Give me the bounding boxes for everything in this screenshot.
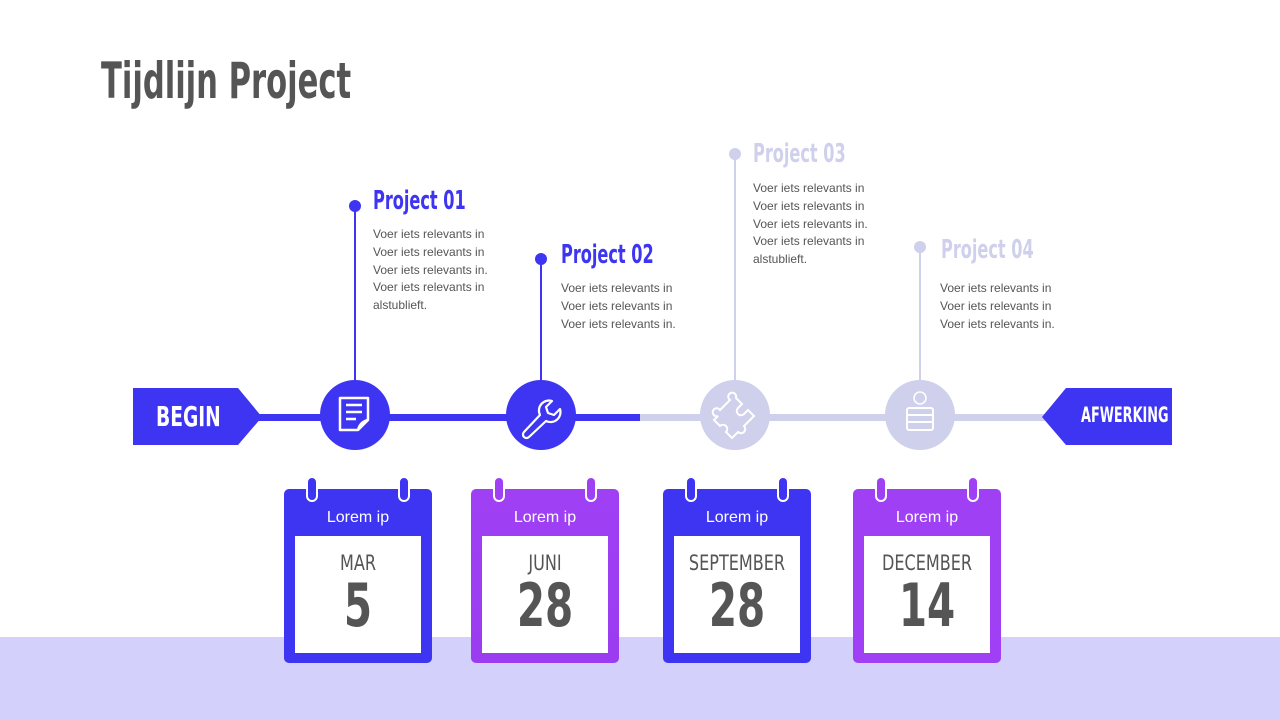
text 01: Voer iets relevants in: [373, 280, 484, 294]
text 01: alstublieft.: [373, 298, 427, 312]
icon: coins: [885, 380, 955, 450]
calendar: MAR 5: 5: [344, 571, 372, 641]
icon: puzzle: [700, 380, 770, 450]
bottom band: [0, 637, 1280, 720]
AFWERKING marker: [1042, 388, 1172, 445]
calendar: DECEMBER 14: DECEMBER: [882, 551, 972, 575]
Project 03: Project 03: [753, 139, 846, 169]
text 02: Voer iets relevants in: [561, 281, 672, 295]
calendar: MAR 5: MAR: [340, 551, 376, 575]
calendar: DECEMBER 14: 14: [899, 571, 955, 641]
calendar: JUNI 28: Lorem ip: [514, 509, 576, 526]
calendar: SEPTEMBER 28: Lorem ip: [706, 509, 768, 526]
calendar: MAR 5: Lorem ip: [327, 509, 389, 526]
text 02: [561, 281, 676, 331]
text 02: Voer iets relevants in: [561, 299, 672, 313]
stems: [349, 148, 926, 385]
line: pending: [640, 414, 1050, 421]
calendar: MAR 5: [284, 489, 432, 663]
calendar: JUNI 28: [471, 489, 619, 663]
text 03: Voer iets relevants in: [753, 181, 864, 195]
text 03: Voer iets relevants in.: [753, 217, 868, 231]
text 04: Voer iets relevants in: [940, 281, 1051, 295]
calendar: JUNI 28: JUNI: [528, 551, 562, 575]
calendar: DECEMBER 14: Lorem ip: [896, 509, 958, 526]
label: BEGIN: BEGIN: [156, 400, 221, 433]
text 01: Voer iets relevants in: [373, 245, 484, 259]
icon: document: [320, 380, 390, 450]
text 04: [940, 281, 1055, 331]
text 01: Voer iets relevants in.: [373, 263, 488, 277]
text 03: Voer iets relevants in: [753, 199, 864, 213]
text 04: Voer iets relevants in: [940, 299, 1051, 313]
Project 04: Project 04: [941, 235, 1034, 265]
text 03: Voer iets relevants in: [753, 234, 864, 248]
calendar: DECEMBER 14: [853, 489, 1001, 663]
calendar: SEPTEMBER 28: [663, 489, 811, 663]
BEGIN marker: [133, 388, 262, 445]
calendar: SEPTEMBER 28: SEPTEMBER: [689, 551, 785, 575]
text 03: [753, 181, 868, 266]
title: Tijdlijn Project: [101, 52, 351, 110]
calendar: JUNI 28: 28: [517, 571, 573, 641]
text 03: alstublieft.: [753, 252, 807, 266]
label: AFWERKING: AFWERKING: [1081, 403, 1169, 427]
text 01: [373, 227, 488, 312]
calendar: SEPTEMBER 28: 28: [709, 571, 765, 641]
text 01: Voer iets relevants in: [373, 227, 484, 241]
text 02: Voer iets relevants in.: [561, 317, 676, 331]
Project 01: Project 01: [373, 186, 466, 216]
icon: wrench: [506, 380, 576, 450]
text 04: Voer iets relevants in.: [940, 317, 1055, 331]
Project 02: Project 02: [561, 240, 654, 270]
line: completed: [250, 414, 640, 421]
